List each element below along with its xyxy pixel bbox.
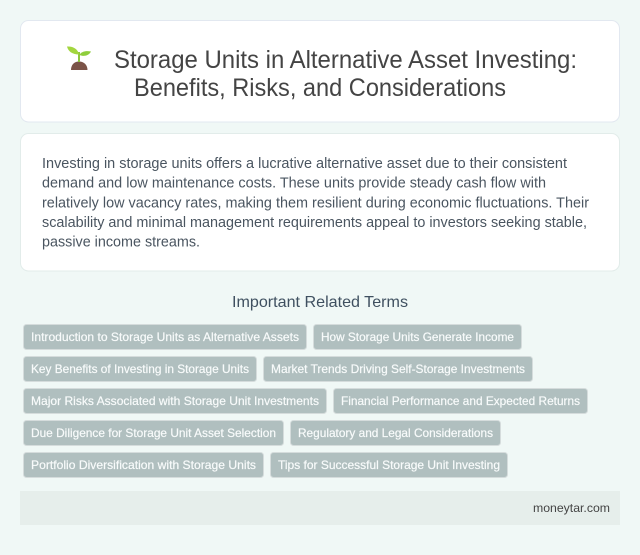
panel: title card <box>20 20 620 122</box>
tag: How Storage Units Generate Income <box>321 330 514 344</box>
heading: important related terms: Important Related Terms <box>232 294 408 311</box>
tag: Regulatory and Legal Considerations <box>298 426 493 440</box>
tag list <box>24 324 588 478</box>
tag: Key Benefits of Investing in Storage Units <box>31 362 249 376</box>
tag: Market Trends Driving Self-Storage Investments <box>271 362 525 376</box>
text block: description: passive income streams. <box>42 234 200 250</box>
tag <box>24 388 326 414</box>
footer <box>20 491 620 525</box>
tag: Due Diligence for Storage Unit Asset Selection <box>31 426 276 440</box>
tag: Financial Performance and Expected Returns <box>341 394 580 408</box>
text block: description: scalability and minimal management requirements appeal to investors seeking stable, <box>42 215 587 231</box>
tag <box>334 388 588 414</box>
tag <box>24 420 284 446</box>
tag <box>314 324 522 350</box>
tag <box>24 356 256 382</box>
tag: Introduction to Storage Units as Alternative Assets <box>31 330 299 344</box>
tag <box>24 452 264 478</box>
text block: description: demand and low maintenance costs. These units provide steady cash flow with <box>42 176 546 192</box>
tag <box>270 452 508 478</box>
tag: Major Risks Associated with Storage Unit Investments <box>31 394 319 408</box>
tag: Tips for Successful Storage Unit Investing <box>278 458 500 472</box>
title: Benefits, Risks, and Considerations <box>134 74 506 102</box>
title: Storage Units in Alternative Asset Investing: <box>114 46 577 74</box>
footer: moneytar.com <box>533 501 610 515</box>
panel: intro paragraph <box>20 134 620 271</box>
text block: description <box>42 156 589 250</box>
title <box>114 46 577 102</box>
tag <box>24 324 306 350</box>
tag: Portfolio Diversification with Storage Units <box>31 458 256 472</box>
text block: description: relatively low vacancy rates, making them resilient during economic fluctuations. Their <box>42 195 589 211</box>
tag <box>264 356 532 382</box>
tag <box>290 420 500 446</box>
text block: description: Investing in storage units offers a lucrative alternative asset due to their consistent <box>42 156 567 172</box>
icon: seedling <box>67 46 91 70</box>
